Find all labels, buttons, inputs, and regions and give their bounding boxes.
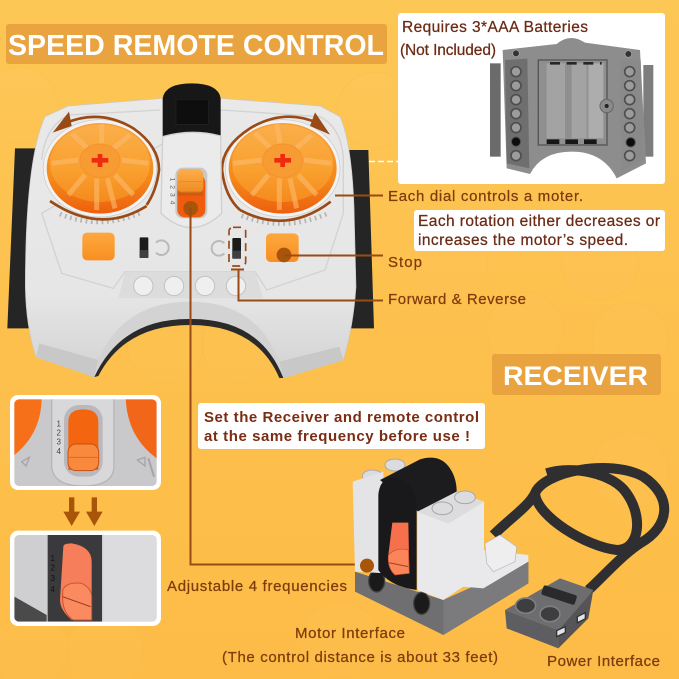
left direction switch — [140, 237, 169, 258]
frequency dot — [360, 559, 374, 573]
tick marks — [60, 212, 327, 224]
label: adjustable frequencies: Adjustable 4 frequencies — [167, 578, 347, 595]
frequency warning box — [198, 403, 485, 449]
dashed connector to battery box — [369, 160, 399, 162]
top black IR housing — [163, 83, 221, 137]
remote slider tile: 4 — [56, 447, 61, 456]
left dial — [43, 120, 157, 217]
battery panel — [398, 13, 665, 184]
receiver slider tile: 4 — [50, 585, 55, 594]
battery compartment illustration — [490, 38, 653, 178]
frequency panel — [161, 132, 222, 227]
rotation arrows: left dial — [50, 112, 159, 219]
label: stop: Stop — [388, 254, 422, 271]
right stop button — [266, 233, 299, 262]
label: each dial: Each dial controls a moter. — [388, 188, 583, 205]
left black side grip — [7, 148, 37, 328]
arch bevel — [94, 302, 283, 378]
motor interface holes — [369, 570, 430, 614]
label: control distance: (The control distance is about 33 feet) — [222, 649, 498, 666]
leader lines — [190, 196, 383, 564]
arch black rim — [94, 319, 283, 378]
label: power interface: Power Interface — [547, 653, 660, 670]
remote control illustration — [7, 83, 374, 378]
bevel outline on face — [42, 110, 343, 290]
frequency warning box: Set the Receiver and remote control — [204, 409, 479, 426]
label: forward and reverse: Forward & Reverse — [388, 291, 526, 308]
receiver illustration — [353, 458, 664, 648]
rotation explanation box: increases the motor’s speed. — [418, 232, 628, 249]
cable socket — [485, 535, 517, 572]
title banner: speed remote control: SPEED REMOTE CONTROL — [8, 30, 384, 62]
underside rim shading — [36, 343, 343, 378]
receiver slider tile: 3 — [50, 574, 55, 583]
frequency warning box: at the same frequency before use ! — [204, 428, 470, 445]
remote slider tile: 3 — [56, 438, 61, 447]
dots on stop and frequency — [183, 201, 291, 262]
remote slider tile: 1 — [56, 420, 61, 429]
down arrows — [63, 497, 103, 526]
dashed highlight around switch — [229, 227, 246, 266]
right black side grip — [347, 150, 374, 328]
battery heading: Requires 3*AAA Batteries — [402, 19, 588, 36]
remote slider tile — [10, 395, 161, 490]
dark base — [355, 562, 528, 635]
receiver slider tile: 2 — [50, 564, 55, 573]
receiver slider — [388, 523, 409, 575]
rotation explanation box: Each rotation either decreases or — [418, 213, 660, 230]
right dial — [225, 120, 340, 217]
frequency slider: 1 2 3 4 — [169, 178, 176, 205]
remote body — [25, 98, 356, 378]
four studs — [118, 272, 263, 298]
receiver banner: RECEIVER — [503, 361, 648, 391]
left white block — [353, 472, 387, 573]
receiver slider tile — [10, 531, 161, 626]
tiles: slider close-ups — [10, 395, 161, 626]
frequency slider — [169, 168, 207, 218]
power plug — [505, 578, 593, 648]
label: motor interface: Motor Interface — [295, 625, 405, 642]
receiver banner — [492, 354, 661, 395]
front studs — [432, 491, 475, 515]
rotation explanation box — [414, 210, 665, 251]
black slider housing — [378, 478, 417, 590]
rotation arrows: right dial — [222, 112, 331, 221]
receiver cable — [493, 468, 664, 590]
left stop button — [82, 233, 115, 260]
right white block — [417, 492, 528, 600]
remote slider tile: 2 — [56, 428, 61, 437]
black IR cylinder — [380, 458, 457, 512]
receiver slider tile: 1 — [50, 554, 55, 563]
rear studs — [362, 459, 405, 482]
not included note: (Not Included) — [400, 42, 496, 59]
right direction switch — [212, 238, 241, 259]
